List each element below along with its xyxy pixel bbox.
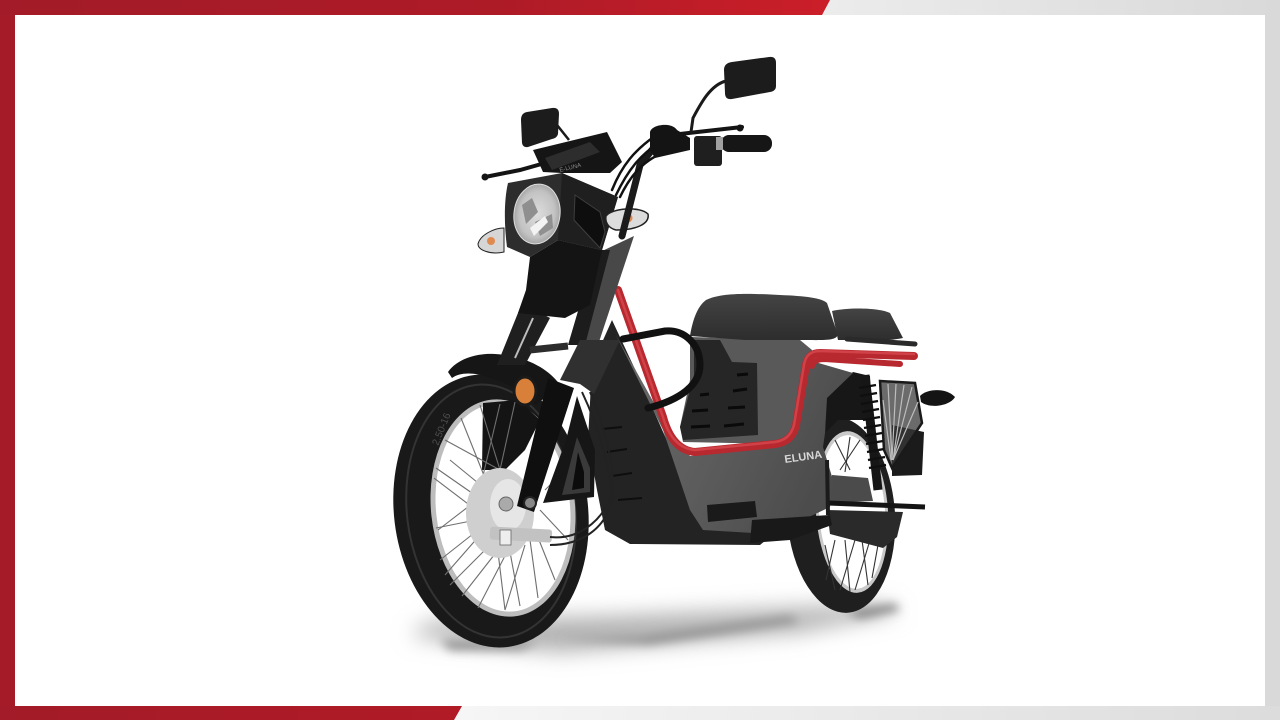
amber reflector bbox=[514, 377, 536, 405]
headlamp lower shroud bbox=[518, 240, 602, 318]
left indicator bbox=[478, 228, 504, 253]
battery cover bbox=[680, 337, 812, 444]
spokes bbox=[434, 402, 568, 610]
ground shadow bbox=[410, 604, 900, 652]
rear shock absorber bbox=[859, 375, 886, 490]
model badge: ELUNA bbox=[784, 449, 823, 466]
headlamp lens bbox=[510, 181, 564, 247]
front tyre bbox=[378, 363, 604, 659]
brake cables bbox=[550, 392, 613, 545]
instrument cluster: E-LUNA bbox=[559, 163, 582, 174]
handlebar controls bbox=[650, 124, 772, 166]
seats bbox=[690, 294, 915, 344]
rear fender and number-plate box bbox=[827, 425, 924, 548]
instrument cluster bbox=[533, 132, 622, 174]
grey body panel bbox=[616, 335, 853, 533]
headlamp housing bbox=[505, 173, 618, 257]
front fender bbox=[448, 354, 560, 405]
rear mudguard behind shock bbox=[824, 372, 872, 432]
axle and brake arm bbox=[490, 497, 552, 545]
right mirror bbox=[691, 57, 776, 132]
left brake lever bbox=[482, 163, 545, 180]
body front vents bbox=[602, 427, 642, 500]
footrest and stand bbox=[707, 460, 925, 543]
right indicator bbox=[606, 209, 648, 230]
dark front body bbox=[588, 320, 790, 545]
tyre size marking: 2.50-16 bbox=[431, 411, 454, 447]
front fork plate bbox=[543, 396, 595, 503]
moped illustration bbox=[378, 57, 955, 659]
drum brake hub bbox=[466, 468, 534, 558]
left fork leg bbox=[497, 303, 568, 365]
front wheel bbox=[378, 363, 604, 659]
tail light bbox=[920, 390, 955, 406]
wheel interior shadow bbox=[482, 400, 540, 470]
black grab handle bbox=[623, 331, 700, 408]
red frame tube bbox=[618, 290, 914, 452]
rear luggage grille bbox=[880, 381, 922, 468]
left mirror bbox=[521, 108, 569, 147]
handlebar stems and cables bbox=[612, 136, 668, 236]
rear wheel bbox=[780, 413, 902, 617]
chrome rim bbox=[420, 392, 586, 624]
right fork leg bbox=[517, 236, 634, 512]
